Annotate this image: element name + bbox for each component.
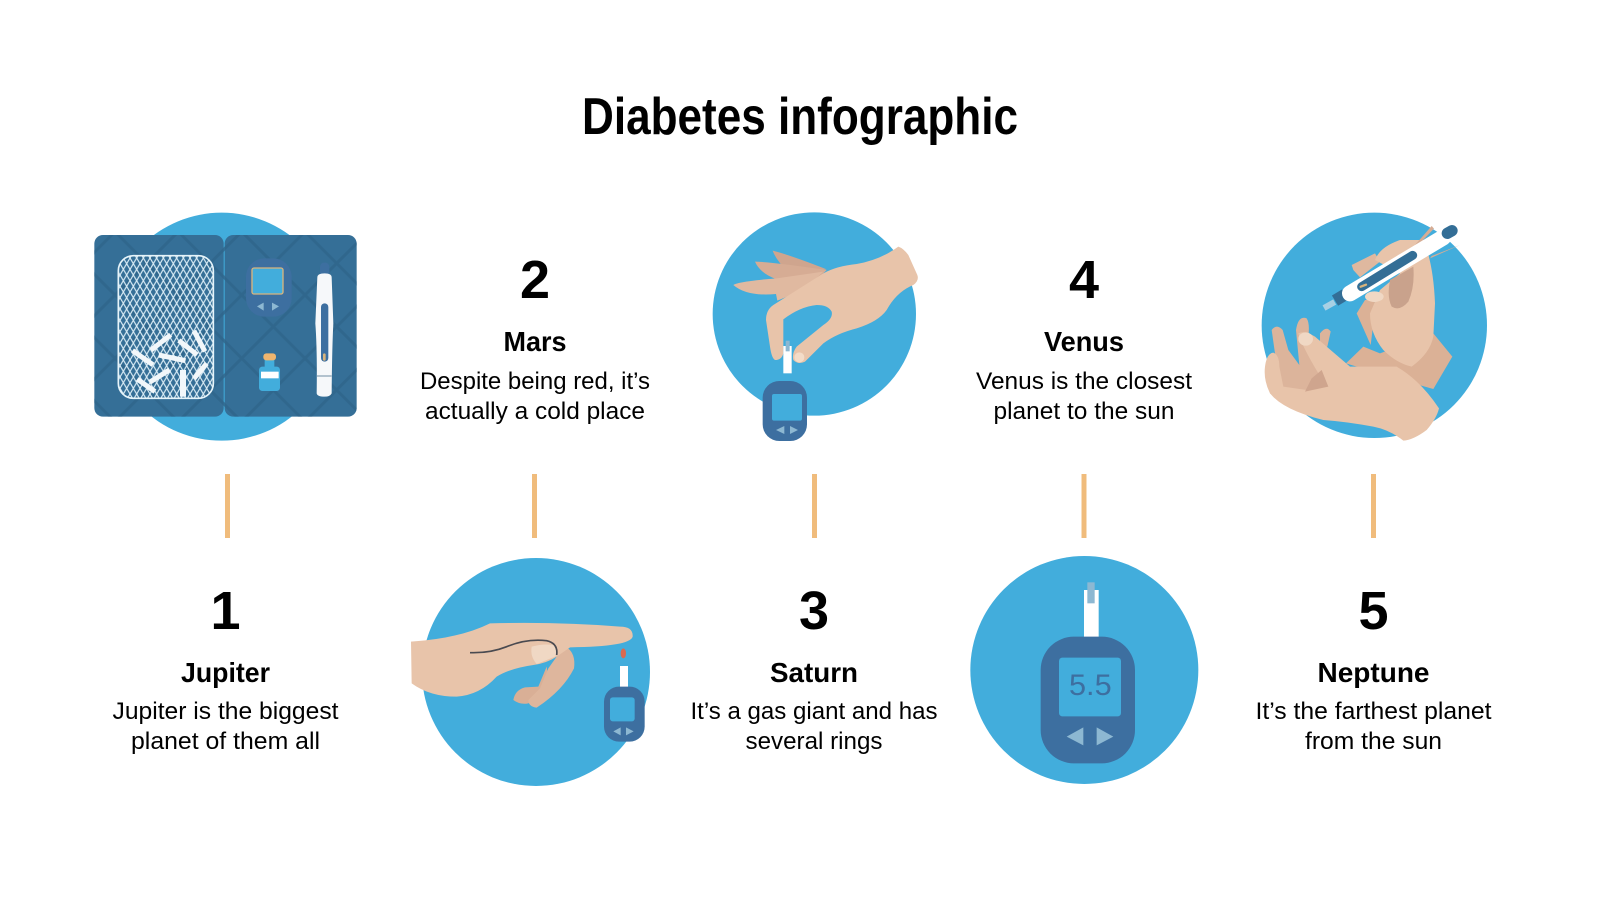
title: Diabetes infographic	[582, 88, 1018, 146]
illustration: finger blood drop	[411, 558, 650, 786]
number 2: 2	[520, 250, 550, 310]
thumbnail	[794, 352, 804, 362]
front curled finger	[528, 647, 574, 708]
finger fold	[1305, 370, 1328, 392]
thumbnail	[531, 644, 556, 664]
test strips	[131, 330, 209, 397]
pen	[1324, 226, 1460, 308]
heading: Mars	[504, 326, 566, 357]
palm shadow	[1389, 267, 1414, 308]
heading: Saturn	[770, 657, 858, 688]
step 1: Jupiter	[112, 581, 339, 755]
small glucose meter	[246, 258, 292, 317]
illustration: glucose meter 5.5	[970, 556, 1198, 784]
meter screen	[1059, 658, 1121, 716]
back fingers	[733, 251, 827, 301]
test strip	[620, 666, 628, 687]
thumb base	[1357, 300, 1375, 345]
description	[112, 698, 339, 755]
lower hand	[1265, 332, 1439, 441]
case pattern	[94, 235, 357, 417]
illustration: test kit case	[94, 213, 357, 441]
description: Despite being red, it’s	[420, 368, 650, 395]
illustration: two hands with lancing pen	[1262, 213, 1487, 441]
glucose meter	[604, 687, 645, 742]
description: Jupiter is the biggest	[112, 698, 339, 725]
number 5: 5	[1358, 581, 1389, 641]
number 1: 1	[210, 581, 241, 641]
description: Venus is the closest	[976, 368, 1192, 395]
right case panel	[225, 235, 357, 417]
heading: Venus	[1044, 326, 1124, 357]
description: several rings	[746, 728, 882, 755]
meter buttons	[1067, 727, 1113, 745]
thumb line	[470, 640, 557, 655]
upper palm	[1370, 240, 1435, 367]
lower nail	[1298, 332, 1313, 346]
glucose meter	[763, 381, 807, 441]
description: from the sun	[1305, 728, 1442, 755]
number 3: 3	[799, 581, 829, 641]
description	[420, 368, 650, 425]
description	[1256, 698, 1492, 755]
lancing pen	[315, 263, 333, 397]
thumb nail	[1365, 291, 1384, 302]
back fingers	[1352, 253, 1380, 277]
hand	[411, 623, 633, 697]
insulin vial	[259, 353, 280, 391]
description: actually a cold place	[425, 398, 645, 425]
blood drop	[621, 648, 626, 658]
step 3: Saturn	[690, 581, 938, 755]
meter reading: 5.5	[1069, 669, 1112, 702]
description: planet to the sun	[994, 398, 1174, 425]
test strip	[1084, 582, 1099, 638]
connector bars	[225, 474, 1376, 538]
upper wrist	[1346, 333, 1452, 389]
description	[690, 698, 938, 755]
step 4: Venus	[976, 250, 1192, 425]
meter body	[1041, 637, 1135, 763]
left case panel	[94, 235, 224, 417]
illustration: hand holding test strip	[713, 212, 918, 441]
hand	[766, 247, 918, 363]
description: It’s the farthest planet	[1256, 698, 1492, 725]
step 5: Neptune	[1256, 581, 1492, 755]
step 2: Mars	[420, 250, 650, 425]
number 4: 4	[1069, 250, 1099, 310]
net pocket	[118, 256, 213, 398]
back curled finger	[513, 667, 550, 704]
description: It’s a gas giant and has	[690, 698, 938, 725]
test strip	[783, 341, 792, 373]
heading: Jupiter	[181, 657, 270, 688]
description	[976, 368, 1192, 425]
lower hand back fingers	[1272, 318, 1331, 393]
description: planet of them all	[131, 728, 320, 755]
heading: Neptune	[1318, 657, 1430, 688]
